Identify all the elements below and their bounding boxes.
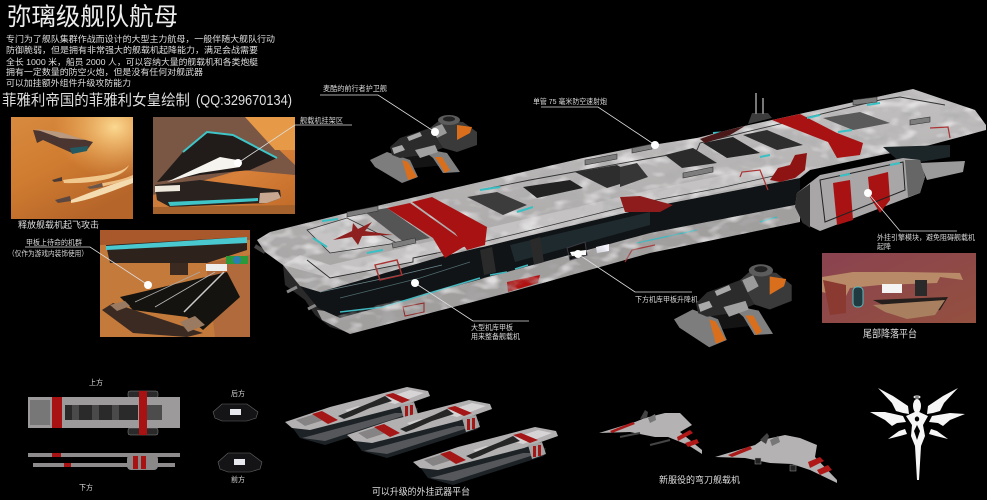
intro text block: 可以加挂额外组件升级攻防能力 — [6, 77, 131, 88]
icon: empire emblem — [870, 388, 965, 480]
callout: deck fighters: （仅作为游戏内装饰使用） — [8, 248, 88, 258]
weapon platform carriers — [285, 387, 558, 485]
orthographic view: top: 上方 — [89, 377, 103, 387]
caption: weapon platforms: 可以升级的外挂武器平台 — [372, 486, 470, 498]
callout: hangar deck — [411, 279, 529, 341]
callout: external engine module: 外挂引擎模块，避免阻碍舰载机 — [877, 232, 975, 242]
ship: hangar band — [300, 176, 800, 318]
ship: deck turrets — [347, 97, 930, 248]
author credit: (QQ:329670134) — [196, 92, 292, 109]
orthographic view: rear: 后方 — [231, 388, 245, 398]
icon: fighter one — [599, 410, 702, 454]
intro text block: 全长 1000 米，船员 2000 人，可以容纳大量的舰载机和各类炮艇 — [6, 56, 258, 67]
ship: red stripes — [387, 114, 863, 258]
ship: engine pod — [795, 158, 925, 231]
panel: rear landing platform screenshot — [822, 253, 976, 323]
intro text block: 拥有一定数量的防空火炮，但是没有任何对舰武器 — [6, 66, 203, 77]
orthographic view: front: 前方 — [231, 474, 245, 484]
callout: fighter rack — [234, 115, 352, 167]
main carrier ship — [250, 85, 987, 340]
icon: fighter two — [715, 433, 837, 483]
panel: fighter rack screenshot — [153, 117, 295, 214]
callout: lower elevator: 下方机库甲板升降机 — [635, 294, 698, 304]
ship: lower hull — [317, 200, 800, 334]
orthographic view: front — [218, 453, 262, 484]
intro text block: 专门为了舰队集群作战而设计的大型主力航母，一般伴随大舰队行动 — [6, 33, 275, 44]
icon: lower elevator craft — [674, 264, 792, 347]
intro text block: 防御脆弱，但是拥有非常强大的舰载机起降能力，满足会战需要 — [6, 44, 258, 55]
callout: lower elevator — [574, 250, 698, 304]
author credit: 菲雅利帝国的菲雅利女皇绘制 — [2, 91, 190, 109]
ship: deck panels and seams — [307, 97, 945, 278]
author credit — [2, 91, 292, 109]
icon: frigate escort — [370, 115, 477, 183]
callout: AA gun — [533, 96, 659, 149]
ship: antenna mast — [700, 93, 772, 143]
orthographic view: side — [28, 453, 180, 492]
panel: launching fighters screenshot — [11, 117, 133, 219]
callout: frigate escort — [320, 83, 439, 136]
ship: cyan lights — [313, 103, 880, 253]
callout: deck fighters: 甲板上待命的机群 — [26, 237, 82, 247]
callout: AA gun: 单管 75 毫米防空速射炮 — [533, 96, 607, 106]
callout: external engine module: 起降 — [877, 241, 891, 251]
orthographic view: top — [28, 377, 180, 435]
caption: rear landing platform: 尾部降落平台 — [863, 327, 917, 340]
title: 弥璃级舰队航母 — [7, 3, 178, 31]
callout: frigate escort: 麦酷的前行者护卫舰 — [323, 83, 387, 93]
ship: nose struts — [255, 246, 350, 333]
ship: rear hangar strip — [883, 145, 965, 180]
caption: fighters: 新服役的弯刀舰载机 — [659, 474, 740, 485]
ship: camouflage mottling — [250, 85, 987, 340]
ship: upper hull — [257, 89, 986, 292]
intro text block — [6, 33, 275, 88]
panel: deck screenshot — [100, 230, 250, 337]
callout: external engine module — [864, 189, 975, 251]
orthographic view: rear — [213, 388, 258, 421]
ship: red insignia — [333, 127, 950, 280]
callout: deck fighters — [8, 237, 152, 289]
orthographic view: side: 下方 — [79, 482, 93, 492]
callout: hangar deck: 用来整备舰载机 — [471, 331, 520, 341]
callout: hangar deck: 大型机库甲板 — [471, 322, 513, 332]
callout: fighter rack: 舰载机挂架区 — [300, 115, 343, 125]
caption: launch: 释放舰载机起飞攻击 — [18, 219, 99, 230]
